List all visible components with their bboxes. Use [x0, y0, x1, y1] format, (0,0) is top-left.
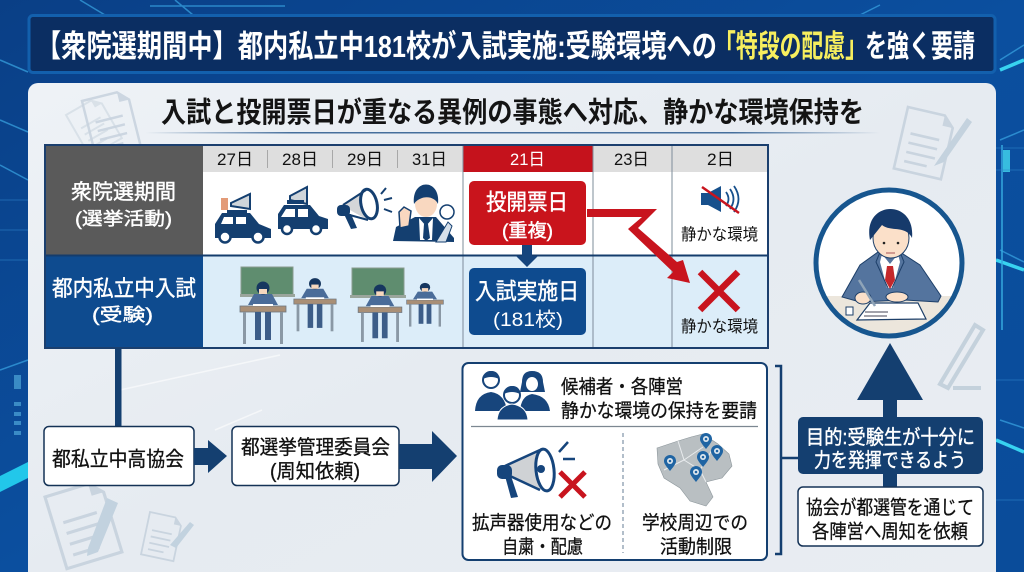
title end: を強く要請: [865, 29, 975, 64]
schedule table: [45, 145, 768, 348]
arrow: red conflict: [587, 209, 690, 283]
text: request line 2: 静かな環境の保持を要請: [561, 400, 757, 422]
icon: speaker muted: [701, 186, 739, 213]
callout: exam day: (181校): [493, 309, 563, 331]
box: request via committee: [798, 487, 983, 546]
box: election committee: [232, 426, 399, 486]
row label: election period: (選挙活動): [75, 209, 172, 229]
text: megaphone caption line 2: 自粛・配慮: [502, 536, 583, 558]
title text: 【衆院選期間中】都内私立中181校が入試実施:受験環境への: [36, 29, 717, 64]
icon: candidate: [393, 184, 454, 242]
row label: entrance exam: (受験): [92, 305, 153, 325]
dates: 21日: [510, 150, 545, 169]
text: map caption: 学校周辺での: [642, 512, 748, 534]
row label: election period: 衆院選期間: [71, 181, 176, 204]
dates: [217, 150, 734, 169]
callout: voting day: [469, 181, 586, 245]
icon: campaign van 1: [215, 194, 271, 242]
icon: candidates group: [475, 371, 550, 420]
arrow: up to examinee: [857, 343, 923, 500]
dates: 2日: [707, 150, 734, 169]
row label: election period: [45, 145, 203, 255]
box: purpose: 目的:受験生が十分に: [806, 426, 975, 449]
connector from exam row: [115, 348, 122, 427]
panel: request to camps: [462, 363, 767, 560]
dates: 28日: [282, 150, 318, 169]
arrow: association to committee: [194, 440, 227, 473]
text: request heading: 候補者・各陣営: [561, 376, 683, 398]
title highlight: 「特段の配慮」: [714, 29, 867, 64]
text: megaphone caption: 拡声器使用などの: [472, 512, 612, 534]
callout: exam day: 入試実施日: [475, 278, 579, 304]
dates: 29日: [347, 150, 383, 169]
callout: voting day: 投開票日: [486, 190, 568, 215]
icon: red cross: [700, 272, 738, 310]
box: purpose: 力を発揮できるよう: [814, 449, 966, 472]
dates: 27日: [217, 150, 253, 169]
dates: 31日: [412, 150, 447, 169]
label: quiet environment top: 静かな環境: [681, 225, 758, 244]
callout: voting day: (重複): [502, 220, 553, 241]
title bar: [29, 16, 995, 72]
arrow: committee to camps: [399, 431, 457, 482]
box: request via committee: 各陣営へ周知を依頼: [812, 521, 968, 543]
dates: 23日: [614, 150, 649, 169]
box: election committee: 都選挙管理委員会: [241, 436, 390, 459]
box: association: [44, 426, 194, 486]
label: quiet environment bottom: 静かな環境: [681, 317, 758, 336]
callout: exam day: [469, 268, 586, 335]
icon: campaign van 2: [278, 187, 328, 234]
icon: exam students: [240, 267, 443, 344]
subtitle: 入試と投開票日が重なる異例の事態へ対応、静かな環境保持を: [161, 96, 864, 129]
row label: entrance exam: 都内私立中入試: [52, 276, 196, 301]
icon: megaphone: [337, 188, 392, 229]
icon: megaphone with cross: [497, 442, 585, 498]
text: map caption line 2: 活動制限: [660, 536, 732, 558]
watermark icons: [45, 90, 983, 569]
icon: Tokyo map: [657, 433, 732, 506]
arrow: voting to exam: [516, 245, 538, 267]
box: purpose: [798, 417, 983, 474]
box: request via committee: 協会が都選管を通じて: [806, 497, 974, 519]
box: association: 都私立中高協会: [52, 448, 184, 471]
illustration: examinee in circle: [815, 190, 965, 346]
row label: entrance exam: [45, 256, 203, 348]
box: election committee: (周知依頼): [270, 460, 360, 483]
bracket: [775, 366, 798, 554]
